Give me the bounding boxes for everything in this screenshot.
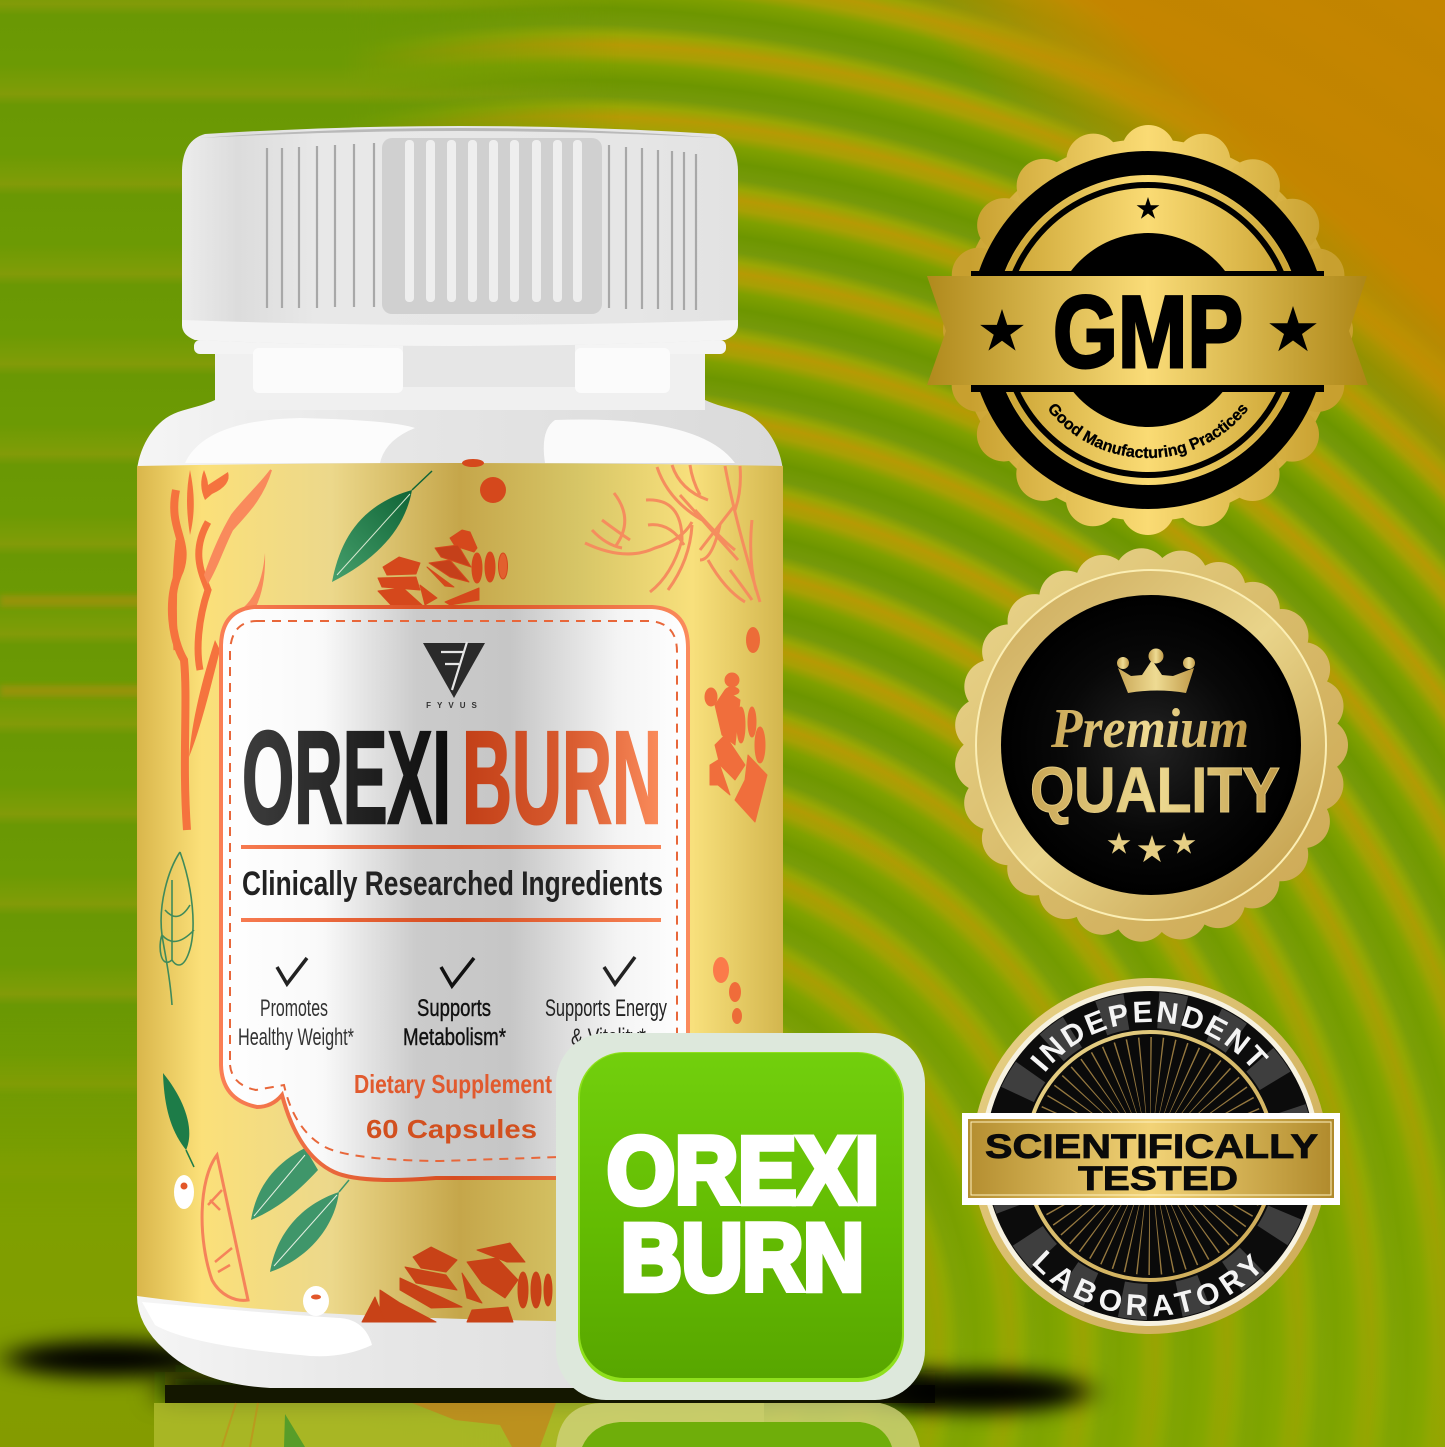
benefit: energy <box>545 957 667 1051</box>
botanical: low leaf left <box>163 1073 194 1167</box>
stars <box>1108 832 1195 862</box>
botanical: lower leaves <box>251 1148 349 1272</box>
product name: BURN <box>462 704 662 851</box>
gummy tub <box>556 1033 925 1400</box>
banner <box>962 1113 1340 1205</box>
benefit: healthy weight <box>238 958 354 1051</box>
arc caption: Good Manufacturing Practices <box>1049 404 1248 458</box>
product bottle <box>137 126 783 1388</box>
benefit: healthy weight: Promotes <box>260 995 328 1022</box>
badge: premium quality <box>971 565 1331 925</box>
benefit: energy: Supports Energy <box>545 995 667 1022</box>
capsule count: 60 Capsules <box>366 1114 537 1144</box>
product name: OREXI <box>242 704 451 851</box>
badge: independent laboratory: LABORATORY <box>1032 1250 1259 1316</box>
benefit: metabolism: Metabolism* <box>403 1024 506 1051</box>
floor shadow <box>5 1341 1090 1412</box>
brand logo: Fyvus: FYVUS <box>426 701 483 710</box>
GMP text: GMP <box>1053 275 1243 389</box>
benefit: metabolism: Supports <box>417 995 491 1022</box>
botanical: ginger top <box>378 530 508 605</box>
benefit: healthy weight: Healthy Weight* <box>238 1024 354 1051</box>
benefit: energy: & Vitality* <box>571 1024 646 1051</box>
tub brand: OREXI <box>607 1118 879 1224</box>
bottle body <box>137 345 783 1388</box>
dots <box>462 459 760 1024</box>
dietary supplement: Dietary Supplement <box>354 1069 552 1099</box>
cap ribs <box>267 143 696 310</box>
quality: QUALITY <box>1030 754 1280 826</box>
botanical: ginger bottom <box>362 1243 552 1322</box>
botanical: ginger right <box>705 673 767 822</box>
cap top lip <box>200 128 720 138</box>
tub brand: BURN <box>621 1205 864 1311</box>
bottle cap <box>182 126 738 346</box>
brand logo: Fyvus <box>423 642 485 710</box>
white label panel <box>221 607 688 1180</box>
ribbon <box>971 271 1324 392</box>
cap center grip <box>382 138 602 314</box>
rule bottom <box>241 918 661 922</box>
tub brand <box>607 1118 879 1311</box>
arc words: INDEPENDENT <box>1030 1001 1269 1072</box>
dashed stitch line <box>230 621 677 1161</box>
badge: GMP <box>927 125 1368 535</box>
neck highlights <box>185 340 735 463</box>
badge: independent laboratory: TESTED <box>1078 1160 1238 1198</box>
bottom white highlight <box>142 1302 372 1356</box>
benefit: metabolism <box>403 958 506 1051</box>
botanical: fern lines <box>585 465 760 602</box>
premium: Premium <box>1050 698 1249 760</box>
badge: independent laboratory <box>962 978 1340 1334</box>
crown <box>1117 648 1195 693</box>
tagline: Clinically Researched Ingredients <box>242 865 663 903</box>
botanical: outline leaf <box>160 852 194 1005</box>
botanical: carrot outline <box>202 1155 248 1300</box>
bottle reflection <box>154 1403 920 1447</box>
rule top <box>241 845 661 849</box>
botanical: kelp <box>172 470 271 830</box>
badge: independent laboratory: SCIENTIFICALLY <box>985 1128 1318 1166</box>
botanical: top leaf <box>332 471 432 582</box>
botanical: berries <box>174 1175 329 1316</box>
yellow label wrap <box>137 463 783 1324</box>
